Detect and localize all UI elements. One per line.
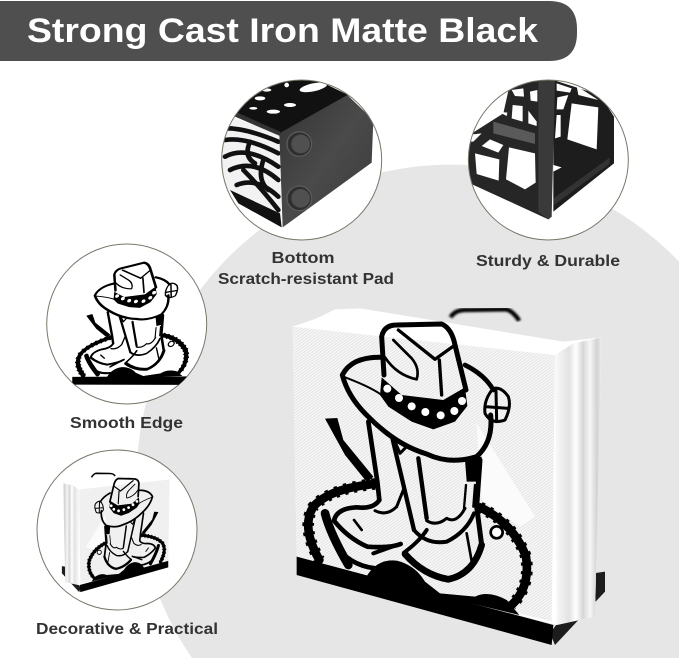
label: smooth edge: Smooth Edge: [70, 415, 183, 432]
panel: smooth edge detail: [47, 244, 207, 414]
rubber pad bottom: [287, 186, 312, 211]
label: scratch-resistant pad: Scratch-resistant Pad: [218, 271, 394, 288]
left pattern: [222, 118, 282, 224]
label: decorative and practical: Decorative & Practical: [36, 621, 218, 638]
left lattice panel: [467, 78, 552, 219]
label: sturdy and durable: Sturdy & Durable: [476, 253, 620, 270]
icon: cowboy silhouette: [72, 262, 190, 385]
rubber pad top: [287, 132, 312, 156]
title: Strong Cast Iron Matte Black: [27, 12, 538, 50]
product thumbnail: [62, 473, 170, 592]
center post: [538, 80, 555, 219]
label: bottom: Bottom: [272, 250, 334, 267]
metal face: [279, 95, 373, 227]
background circle: [137, 165, 679, 658]
header banner: [0, 1, 577, 61]
panel: sturdy detail: [467, 78, 628, 240]
main product: cowboy boots napkin holder: [293, 308, 605, 645]
panel: decorative detail: [37, 450, 197, 610]
top pattern: [238, 80, 348, 133]
panel: bottom pad detail: [220, 75, 382, 240]
right panel: [553, 80, 614, 212]
